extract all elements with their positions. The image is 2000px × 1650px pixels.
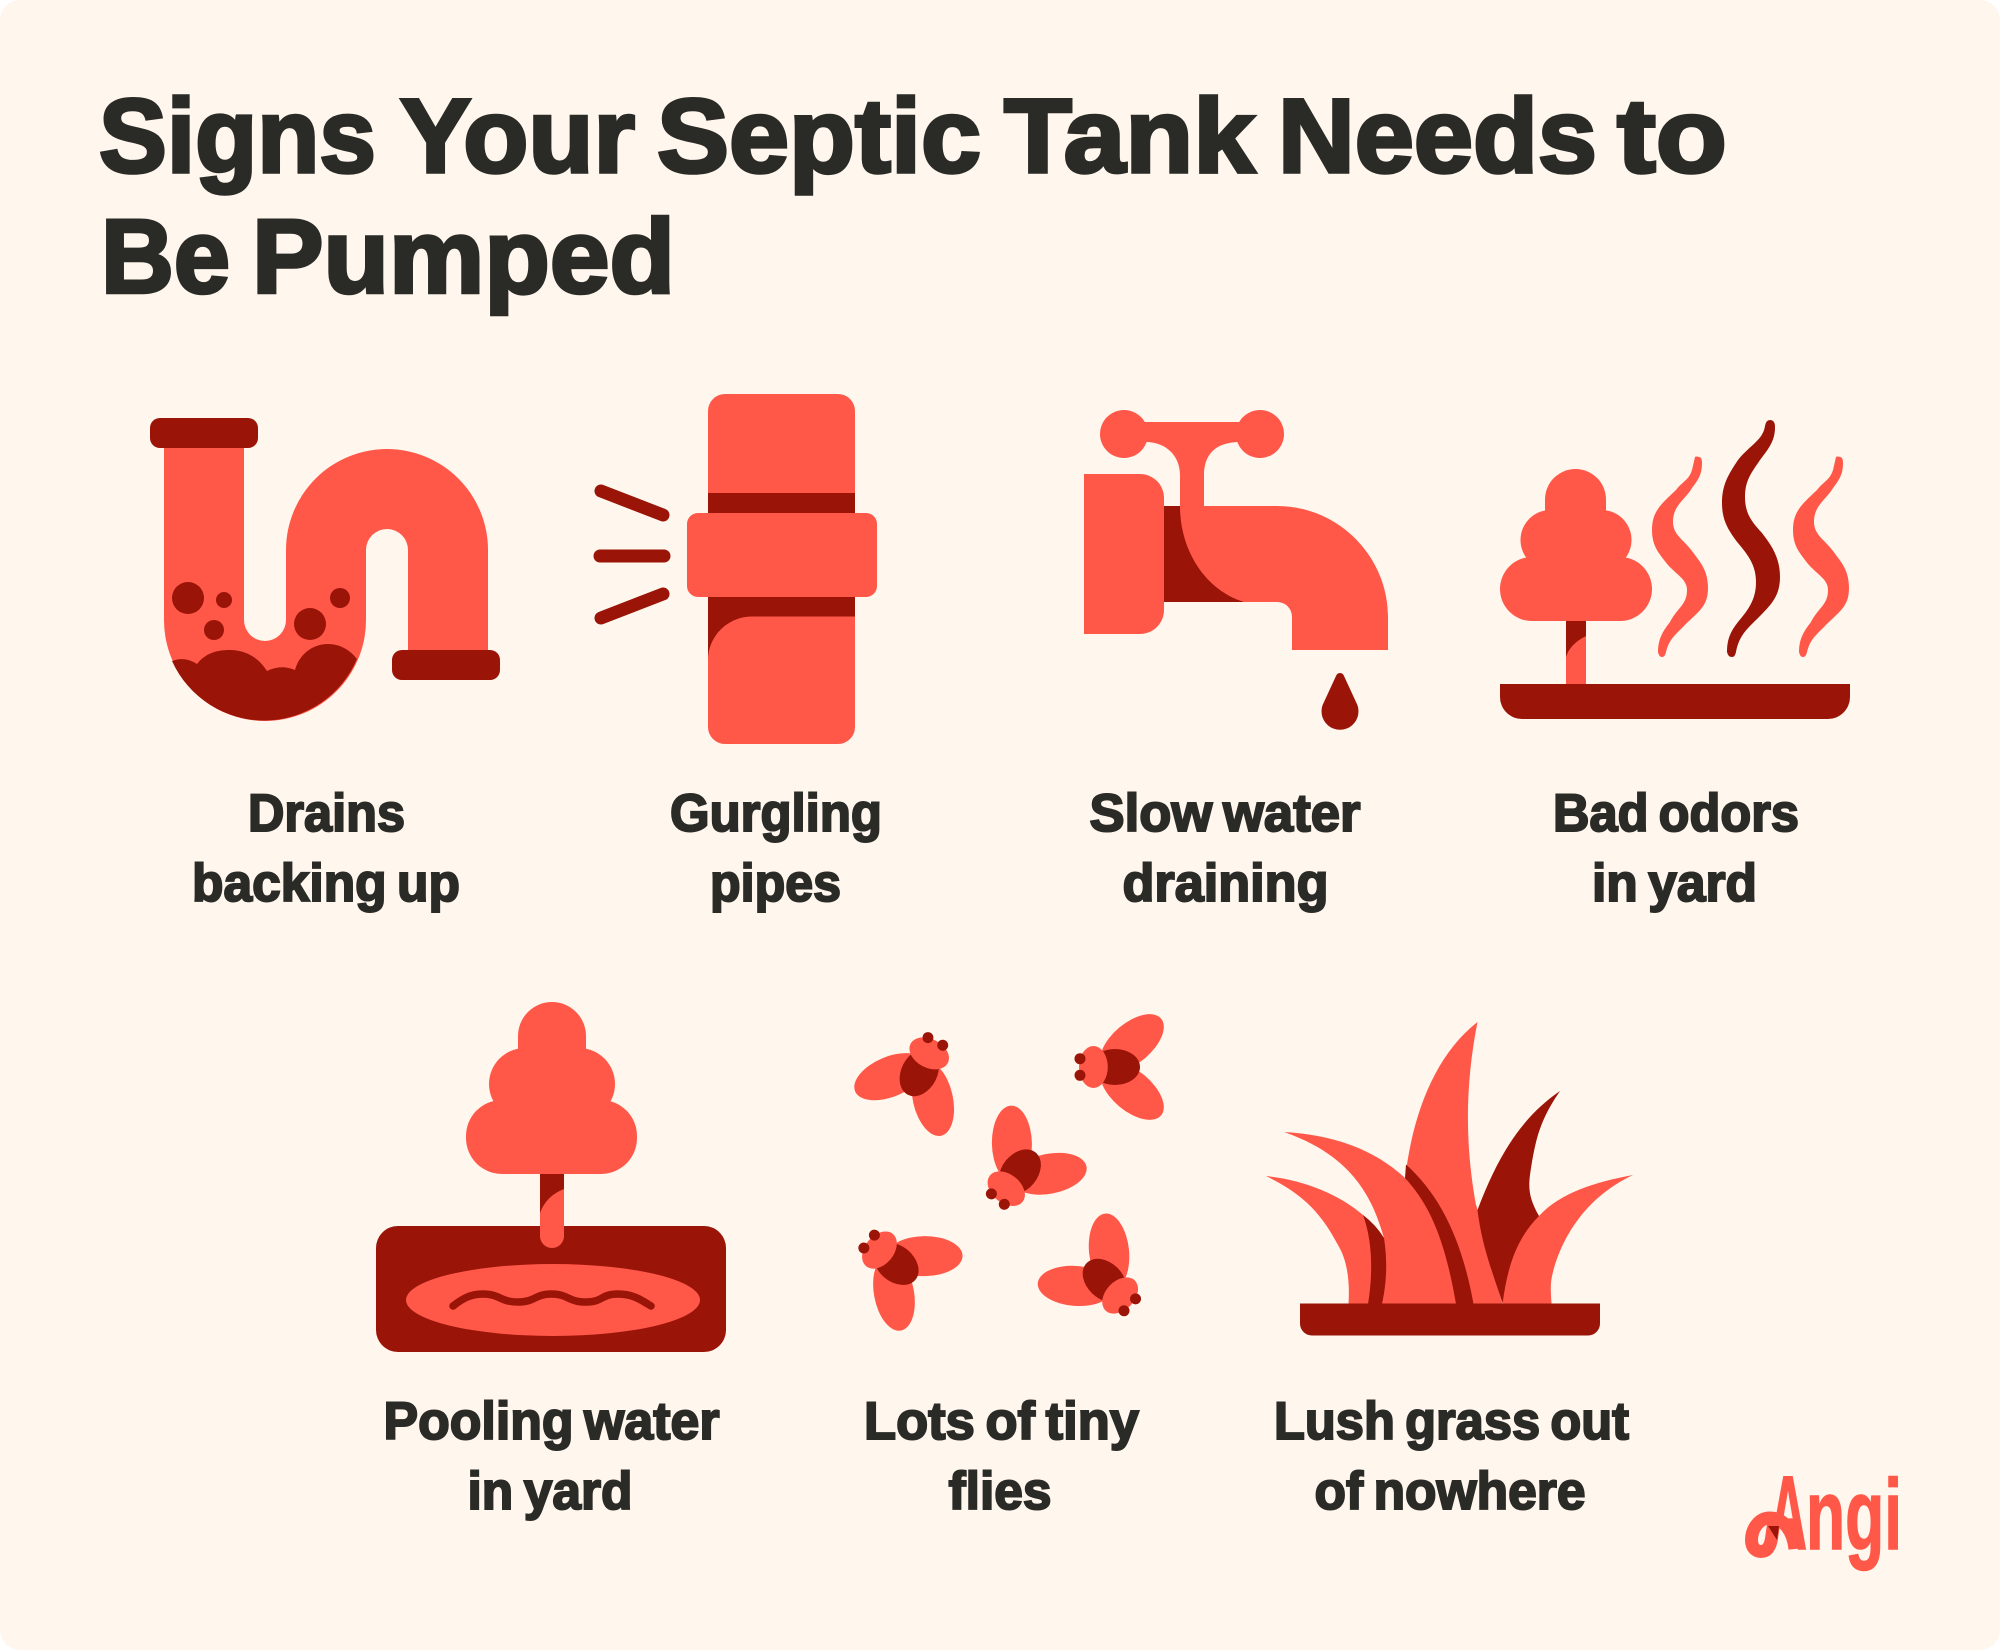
label: lush grass out of nowhere: Lush grass out xyxy=(1274,1392,1629,1451)
label: bad odors in yard: Bad odors xyxy=(1553,784,1799,843)
label: bad odors in yard xyxy=(1553,784,1799,913)
label: bad odors in yard: in yard xyxy=(1592,854,1757,913)
label: drains backing up: backing up xyxy=(192,854,460,913)
title: to xyxy=(1617,78,1727,195)
title: Your xyxy=(400,78,635,195)
label: drains backing up: Drains xyxy=(248,784,405,843)
title: Signs xyxy=(99,78,376,195)
label: gurgling pipes: pipes xyxy=(710,854,841,913)
icon: dripping faucet xyxy=(1084,410,1388,730)
label: lots of tiny flies: Lots of tiny xyxy=(864,1392,1140,1451)
title: Pumped xyxy=(252,198,675,316)
label: lush grass out of nowhere: of nowhere xyxy=(1314,1462,1586,1521)
label: gurgling pipes xyxy=(670,784,882,913)
logo: Angi: A xyxy=(1769,1455,1807,1572)
label: pooling water in yard: Pooling water xyxy=(384,1392,720,1451)
label: pooling water in yard xyxy=(384,1392,720,1521)
title: Needs xyxy=(1278,78,1597,195)
icon: tree with odor waves xyxy=(1500,420,1850,719)
label: slow water draining: draining xyxy=(1122,854,1328,913)
title: Be xyxy=(101,198,230,316)
logo: Angi: ngi xyxy=(1806,1459,1902,1571)
label: slow water draining xyxy=(1090,784,1360,913)
icon: tree over pooling water xyxy=(376,1002,726,1352)
title xyxy=(99,78,1727,316)
label: gurgling pipes: Gurgling xyxy=(670,784,882,843)
icon: lush grass xyxy=(1266,1022,1633,1336)
label: lots of tiny flies: flies xyxy=(948,1462,1052,1521)
title: Tank xyxy=(1004,78,1256,195)
icon: flies xyxy=(824,1003,1178,1354)
label: slow water draining: Slow water xyxy=(1090,784,1360,843)
label: lots of tiny flies xyxy=(864,1392,1140,1521)
icon: clogged drain pipe xyxy=(150,418,500,721)
title: Septic xyxy=(657,78,981,195)
label: drains backing up xyxy=(192,784,460,913)
icon: gurgling pipe xyxy=(600,394,877,744)
logo: Angi xyxy=(1752,1455,1902,1572)
label: pooling water in yard: in yard xyxy=(468,1462,632,1521)
label: lush grass out of nowhere xyxy=(1274,1392,1629,1521)
